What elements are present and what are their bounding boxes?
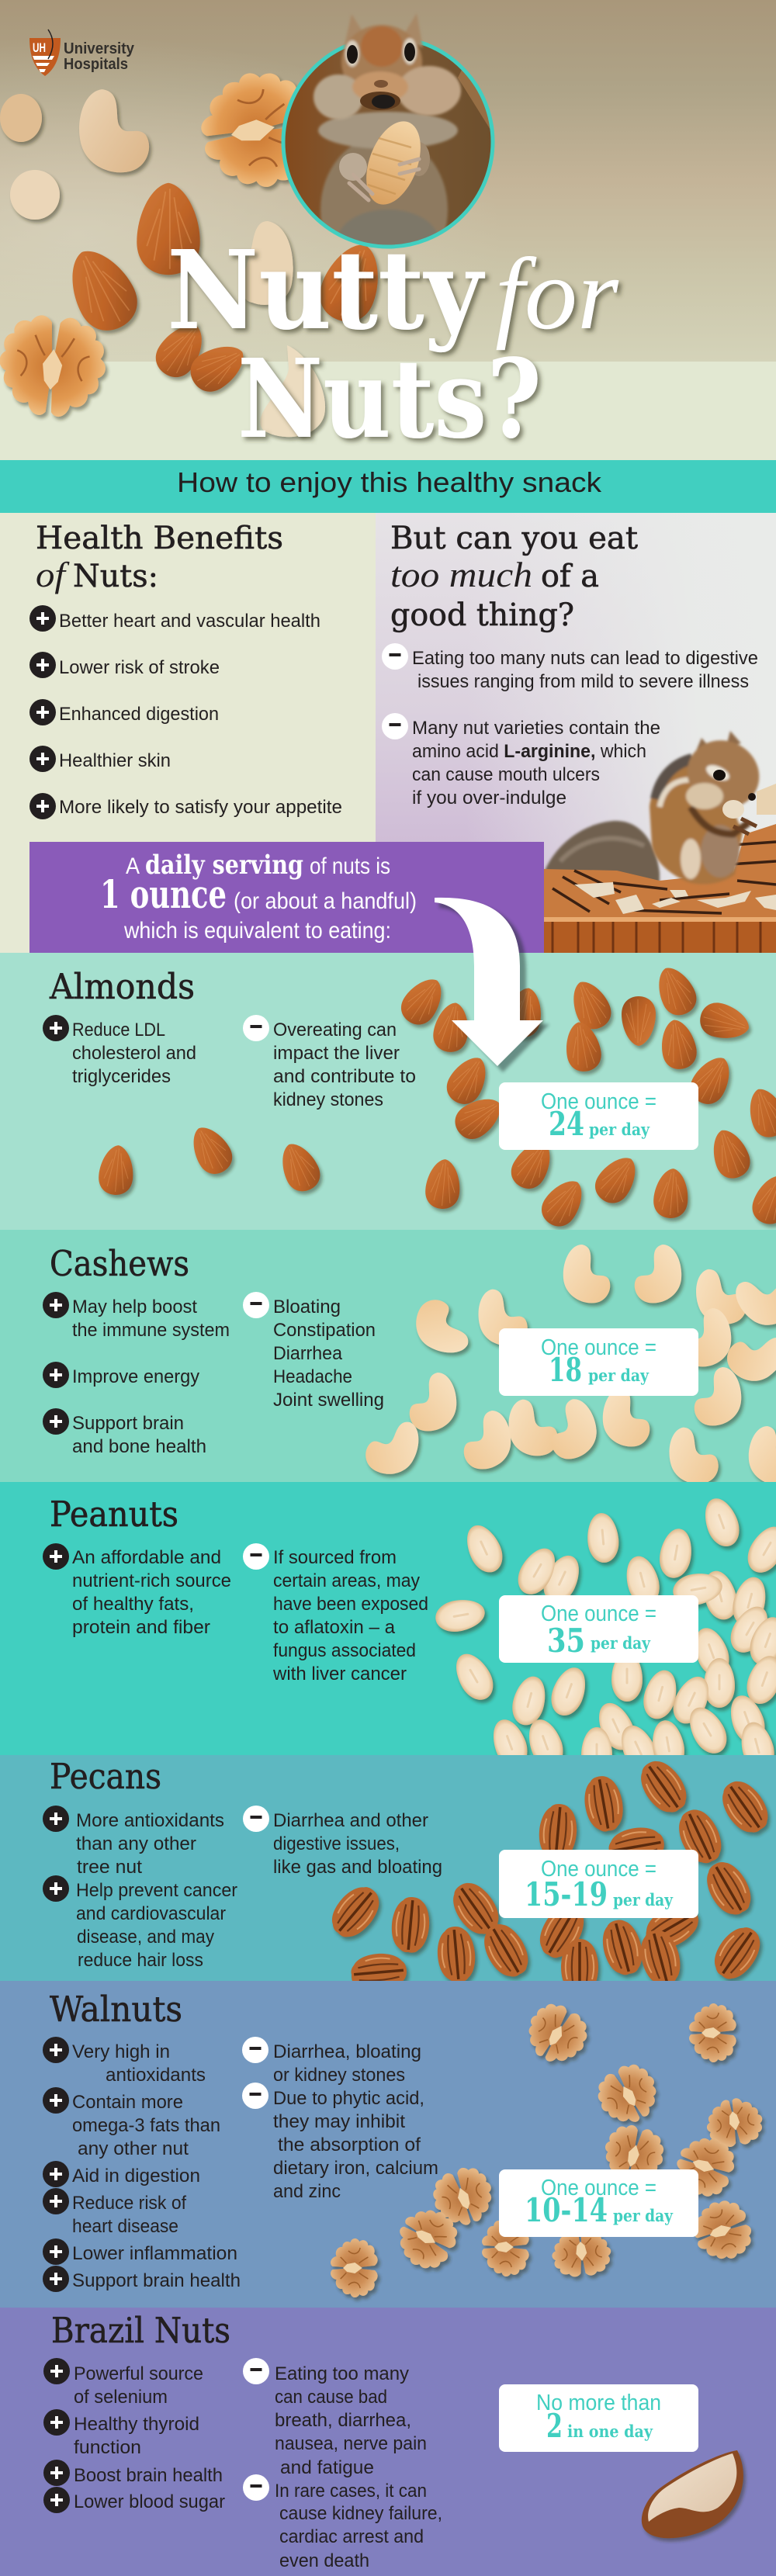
risks: peanuts: If sourced from <box>273 1547 397 1568</box>
brazil nut <box>642 2450 743 2538</box>
benefits: brazil nuts: of selenium <box>74 2387 168 2408</box>
panel: almonds <box>0 953 776 1233</box>
warnings list: Many nut varieties contain the <box>412 718 660 739</box>
serving: cashews: One ounce = <box>541 1335 656 1360</box>
benefits: pecans: than any other <box>76 1833 196 1854</box>
serving: pecans: One ounce = <box>541 1857 656 1882</box>
serving: peanuts: One ounce = <box>541 1601 656 1626</box>
benefits: walnuts: Support brain health <box>72 2270 241 2291</box>
serving: brazil nuts: No more than <box>536 2391 661 2415</box>
risks: peanuts: have been exposed <box>273 1594 428 1615</box>
heading: too much <box>390 521 638 633</box>
warnings list <box>382 643 758 808</box>
cashew pile <box>360 1245 776 1488</box>
heading: brazil nuts: Brazil Nuts <box>51 2310 230 2351</box>
risks: brazil nuts: Eating too many <box>275 2363 409 2384</box>
benefits: brazil nuts: Lower blood sugar <box>74 2491 225 2512</box>
heading: too much: But can you eat <box>390 521 638 556</box>
benefits: peanuts: of healthy fats, <box>72 1594 194 1615</box>
benefits: walnuts: Contain more <box>72 2092 183 2113</box>
risks: peanuts: to aflatoxin – a <box>273 1617 396 1638</box>
risks: cashews: Constipation <box>273 1320 376 1341</box>
chipmunk in circle <box>281 15 495 248</box>
serving: cashews: per day <box>588 1366 650 1385</box>
benefits: walnuts: omega-3 fats than <box>72 2115 220 2136</box>
risks: pecans: Diarrhea and other <box>273 1810 428 1831</box>
title: Nutty for Nuts?: Nuts? <box>237 336 542 463</box>
benefits: pecans: disease, and may <box>77 1927 214 1948</box>
risks: almonds: kidney stones <box>273 1089 383 1110</box>
warnings list: if you over-indulge <box>412 788 566 808</box>
risks: peanuts: with liver cancer <box>272 1664 407 1684</box>
callout: daily serving: 1 ounce <box>100 871 227 917</box>
benefits: cashews <box>43 1292 230 1457</box>
benefits: pecans: tree nut <box>77 1857 142 1878</box>
risks: walnuts: or kidney stones <box>273 2065 405 2086</box>
risks: cashews: Joint swelling <box>273 1390 384 1411</box>
logo: University Hospitals: UH <box>33 40 46 55</box>
heading: health benefits: Health Benefits <box>36 521 283 556</box>
risks: brazil nuts: and fatigue <box>280 2457 374 2478</box>
chipmunk on basket <box>544 729 776 953</box>
heading: too much: of a <box>541 559 599 594</box>
arrow: daily serving to nuts <box>435 898 549 1072</box>
panel: walnuts <box>0 1981 776 2308</box>
risks: peanuts: certain areas, may <box>273 1570 420 1591</box>
risks: cashews: Bloating <box>273 1297 341 1317</box>
callout: daily serving: daily serving <box>145 850 303 881</box>
benefit list <box>29 605 342 819</box>
benefits: walnuts <box>43 2037 241 2292</box>
logo: University Hospitals: Hospitals <box>64 56 128 73</box>
serving: walnuts: per day <box>613 2206 674 2225</box>
panel: cashews <box>0 1230 776 1488</box>
logo: University Hospitals: University <box>64 40 135 57</box>
benefits: cashews: May help boost <box>72 1297 197 1317</box>
benefits: peanuts: nutrient-rich source <box>72 1570 231 1591</box>
benefits: walnuts: heart disease <box>72 2216 178 2237</box>
benefits: walnuts: Aid in digestion <box>72 2166 200 2186</box>
benefit list: Better heart and vascular health <box>59 611 320 632</box>
risks: brazil nuts: In rare cases, it can <box>275 2481 427 2502</box>
benefit list: Lower risk of stroke <box>59 657 220 678</box>
benefits: pecans: reduce hair loss <box>78 1950 203 1971</box>
benefit list: Healthier skin <box>59 750 171 771</box>
heading: cashews: Cashews <box>50 1243 189 1284</box>
benefit list: Enhanced digestion <box>59 704 219 725</box>
serving: walnuts <box>499 2169 698 2237</box>
risks: almonds: Overeating can <box>273 1020 397 1040</box>
panel: peanuts <box>0 1482 776 1778</box>
risks: walnuts: the absorption of <box>278 2135 421 2155</box>
benefits: peanuts: An affordable and <box>72 1547 221 1568</box>
callout: daily serving <box>29 842 544 953</box>
benefits: walnuts: Lower inflammation <box>72 2243 237 2264</box>
benefits: peanuts <box>43 1543 231 1638</box>
serving: cashews <box>499 1328 698 1396</box>
header background <box>0 0 776 460</box>
risks: walnuts: they may inhibit <box>273 2111 405 2132</box>
benefits: brazil nuts <box>43 2358 225 2513</box>
risks: brazil nuts <box>243 2358 442 2571</box>
warnings list: can cause mouth ulcers <box>412 764 600 785</box>
callout: daily serving: of nuts is <box>310 853 390 879</box>
heading: pecans: Pecans <box>50 1756 161 1797</box>
heading: too much: too much <box>390 555 532 594</box>
risks: pecans <box>243 1806 442 1878</box>
serving: almonds: One ounce = <box>541 1089 656 1114</box>
risks: walnuts: dietary iron, calcium <box>273 2158 438 2179</box>
benefits: brazil nuts: function <box>74 2437 141 2458</box>
benefits: brazil nuts: Powerful source <box>74 2363 203 2384</box>
benefits: peanuts: protein and fiber <box>72 1617 210 1638</box>
risks: cashews: Headache <box>273 1366 352 1387</box>
benefits: pecans: More antioxidants <box>76 1810 224 1831</box>
serving: peanuts <box>499 1595 698 1663</box>
benefits: walnuts: any other nut <box>78 2138 189 2159</box>
almond pile <box>97 961 776 1233</box>
header nuts photo <box>0 64 391 437</box>
benefits: walnuts: Very high in <box>72 2041 170 2062</box>
serving: cashews: 18 <box>549 1351 582 1389</box>
benefits: cashews: Improve energy <box>72 1366 199 1387</box>
subtitle band: How to enjoy this healthy snack <box>177 466 602 498</box>
heading: almonds: Almonds <box>49 966 195 1007</box>
subtitle band <box>0 460 776 513</box>
risks: brazil nuts: cardiac arrest and <box>279 2526 424 2547</box>
logo: University Hospitals <box>29 29 135 76</box>
benefits: almonds: cholesterol and <box>72 1043 196 1064</box>
risks: almonds <box>243 1015 416 1110</box>
callout: daily serving: (or about a handful) <box>234 888 417 914</box>
benefits: almonds: triglycerides <box>72 1066 171 1087</box>
heading: health benefits <box>36 521 283 594</box>
serving: brazil nuts: 2 <box>546 2407 563 2445</box>
serving: pecans: 15-19 <box>525 1875 608 1913</box>
pecan pile <box>324 1754 776 1994</box>
callout: daily serving: which is equivalent to eating: <box>123 918 391 943</box>
serving: walnuts: 10-14 <box>525 2191 608 2229</box>
benefits: almonds: Reduce LDL <box>72 1020 165 1040</box>
warnings list: issues ranging from mild to severe illness <box>417 671 749 692</box>
risks: pecans: digestive issues, <box>273 1833 400 1854</box>
risks: cashews: Diarrhea <box>273 1343 343 1364</box>
benefits: brazil nuts: Healthy thyroid <box>74 2414 199 2435</box>
risks: brazil nuts: nausea, nerve pain <box>275 2433 427 2454</box>
risks: walnuts: Due to phytic acid, <box>273 2088 424 2109</box>
benefits: cashews: the immune system <box>72 1320 230 1341</box>
serving: brazil nuts: in one day <box>567 2422 653 2441</box>
risks: brazil nuts: cause kidney failure, <box>279 2503 442 2524</box>
benefits: almonds <box>43 1015 196 1087</box>
risks: almonds: impact the liver <box>273 1043 400 1064</box>
serving: walnuts: One ounce = <box>541 2176 656 2200</box>
benefits: walnuts: antioxidants <box>106 2065 206 2086</box>
panel: brazil nuts <box>0 2308 776 2576</box>
serving: peanuts: per day <box>591 1633 651 1653</box>
risks: brazil nuts: even death <box>279 2550 369 2571</box>
panel: pecans <box>0 1754 776 1994</box>
callout: daily serving: A <box>126 853 140 879</box>
benefits: cashews: and bone health <box>72 1436 206 1457</box>
peanut pile <box>433 1494 776 1778</box>
serving: almonds <box>499 1082 698 1150</box>
benefits: walnuts: Reduce risk of <box>72 2193 186 2214</box>
benefits: pecans: and cardiovascular <box>76 1903 226 1924</box>
risks: walnuts <box>242 2037 438 2202</box>
warnings list: Eating too many nuts can lead to digestive <box>412 648 758 669</box>
heading: health benefits: Nuts: <box>73 559 158 594</box>
benefits: pecans: Help prevent cancer <box>76 1880 237 1901</box>
risks: almonds: and contribute to <box>273 1066 416 1087</box>
benefits: cashews: Support brain <box>72 1413 184 1434</box>
heading: too much: good thing? <box>390 597 574 633</box>
risks: pecans: like gas and bloating <box>273 1857 442 1878</box>
risks: walnuts: and zinc <box>273 2181 341 2202</box>
benefits: pecans <box>43 1806 237 1971</box>
serving: almonds: per day <box>589 1120 650 1139</box>
benefit list: More likely to satisfy your appetite <box>59 797 342 818</box>
benefits: brazil nuts: Boost brain health <box>74 2465 223 2486</box>
risks: brazil nuts: breath, diarrhea, <box>275 2410 411 2431</box>
title: Nutty for Nuts?: Nutty <box>167 227 485 355</box>
panel: can you eat too much <box>376 513 776 953</box>
title: Nutty for Nuts? <box>167 227 619 463</box>
serving: almonds: 24 <box>549 1105 584 1143</box>
warnings list: amino acid L-arginine, which <box>412 741 646 762</box>
risks: peanuts <box>243 1543 428 1684</box>
serving: pecans: per day <box>613 1890 674 1909</box>
heading: peanuts: Peanuts <box>50 1494 178 1535</box>
risks: brazil nuts: can cause bad <box>275 2387 387 2408</box>
walnut pile <box>331 1996 766 2297</box>
risks: peanuts: fungus associated <box>273 1640 416 1661</box>
title: Nutty for Nuts?: for <box>495 237 619 351</box>
panel: health benefits <box>0 513 376 953</box>
heading: health benefits: of <box>36 555 71 594</box>
serving: peanuts: 35 <box>547 1622 585 1660</box>
risks: walnuts: Diarrhea, bloating <box>273 2041 421 2062</box>
serving: brazil nuts <box>499 2384 698 2452</box>
risks: cashews <box>243 1292 384 1411</box>
heading: walnuts: Walnuts <box>50 1989 182 2030</box>
serving: pecans <box>499 1850 698 1918</box>
